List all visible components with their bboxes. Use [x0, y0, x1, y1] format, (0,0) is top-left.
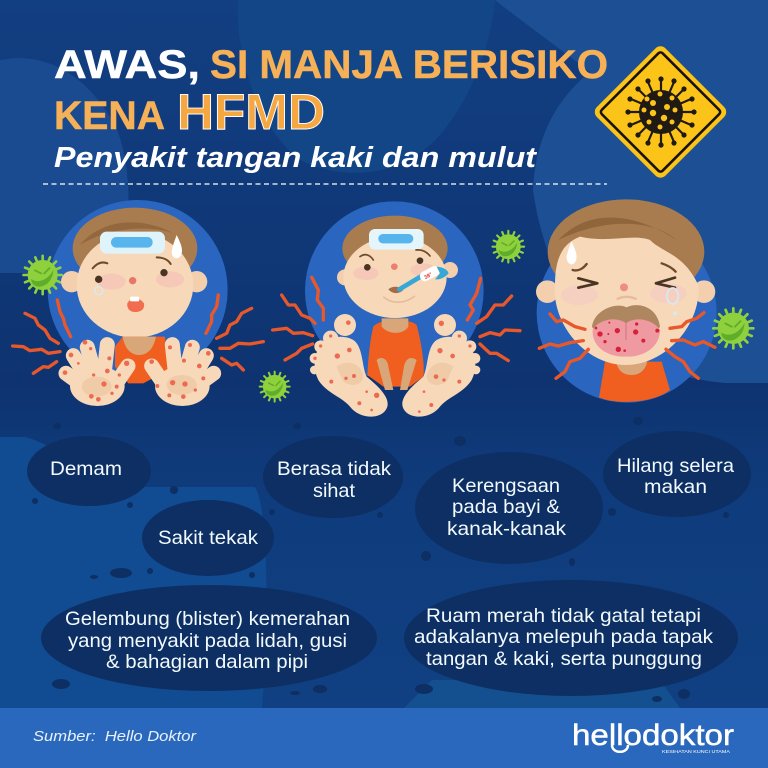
- logo: KESIHATAN KUNCI UTAMA: [662, 749, 730, 754]
- thermometer: 38°: [424, 272, 433, 281]
- bubble: Berasa tidak sihat: Berasa tidak: [277, 458, 391, 480]
- bubble: Hilang selera makan: [603, 431, 751, 517]
- title: HFMD: [177, 84, 325, 140]
- bubble: Berasa tidak sihat: [263, 436, 403, 518]
- title: AWAS,: [54, 43, 200, 87]
- virus top right: [492, 231, 524, 262]
- bubble: Kerengsaan: [415, 452, 603, 564]
- head: [337, 216, 458, 318]
- bubble: Gelembung: Gelembung (blister) kemerahan: [65, 608, 350, 630]
- thermometer: [399, 264, 449, 289]
- footer bar: [0, 708, 768, 768]
- shirt: [367, 320, 424, 387]
- bubble: Demam: [27, 436, 151, 506]
- bubble: Demam: Demam: [50, 458, 122, 480]
- illustration: child with fever and spotted hands: [13, 200, 263, 406]
- bubble: Gelembung: yang menyakit pada lidah, gusi: [68, 630, 347, 652]
- pain lines: [273, 277, 520, 361]
- mouth and tongue: [592, 305, 660, 357]
- virus bottom left: [260, 372, 290, 402]
- bubble: Gelembung: [41, 585, 377, 691]
- right foot: [402, 314, 480, 417]
- bubble: Gelembung: & bahagian dalam pipi: [106, 651, 308, 673]
- head: [536, 199, 715, 365]
- virus right: [713, 308, 753, 348]
- icon: warning sign with virus: [592, 43, 729, 181]
- bubble: Ruam merah: Ruam merah tidak gatal tetapi: [426, 605, 701, 627]
- subtitle: Penyakit tangan kaki dan mulut: [54, 142, 537, 174]
- title: SI MANJA BERISIKO: [210, 43, 608, 87]
- title: [54, 43, 608, 140]
- right hand: [149, 343, 214, 406]
- illustration: child with spotted tongue: [536, 199, 753, 403]
- decorative specks: [32, 417, 729, 702]
- bubble: Kerengsaan: kanak-kanak: [447, 518, 566, 540]
- bubble: Hilang selera makan: Hilang selera: [617, 455, 734, 477]
- illustration: child with thermometer and spotted feet: [260, 201, 524, 417]
- bubble: Hilang selera makan: makan: [644, 476, 707, 498]
- pain lines: [539, 313, 715, 378]
- bubble: Sakit tekak: Sakit tekak: [158, 527, 258, 549]
- title: KENA: [54, 94, 165, 138]
- logo: hellodoktor: [572, 719, 734, 752]
- head: [61, 208, 207, 338]
- virus left: [23, 256, 62, 294]
- bubble: Berasa tidak sihat: sihat: [313, 480, 356, 502]
- bubble: Ruam merah: tangan & kaki, serta punggung: [426, 648, 702, 670]
- pain lines: [13, 295, 263, 373]
- bubble: Kerengsaan: pada bayi &: [452, 496, 560, 518]
- bubble: Sakit tekak: [142, 500, 274, 576]
- shirt: [115, 337, 168, 383]
- bubble: Ruam merah: [404, 580, 738, 696]
- bubble: Ruam merah: adakalanya melepuh pada tapak: [414, 626, 713, 648]
- source: Sumber: Hello Doktor: [33, 728, 197, 745]
- left foot: [310, 314, 388, 417]
- bubble: Kerengsaan: Kerengsaan: [452, 475, 560, 497]
- left hand: [63, 340, 129, 406]
- shirt: [599, 362, 670, 402]
